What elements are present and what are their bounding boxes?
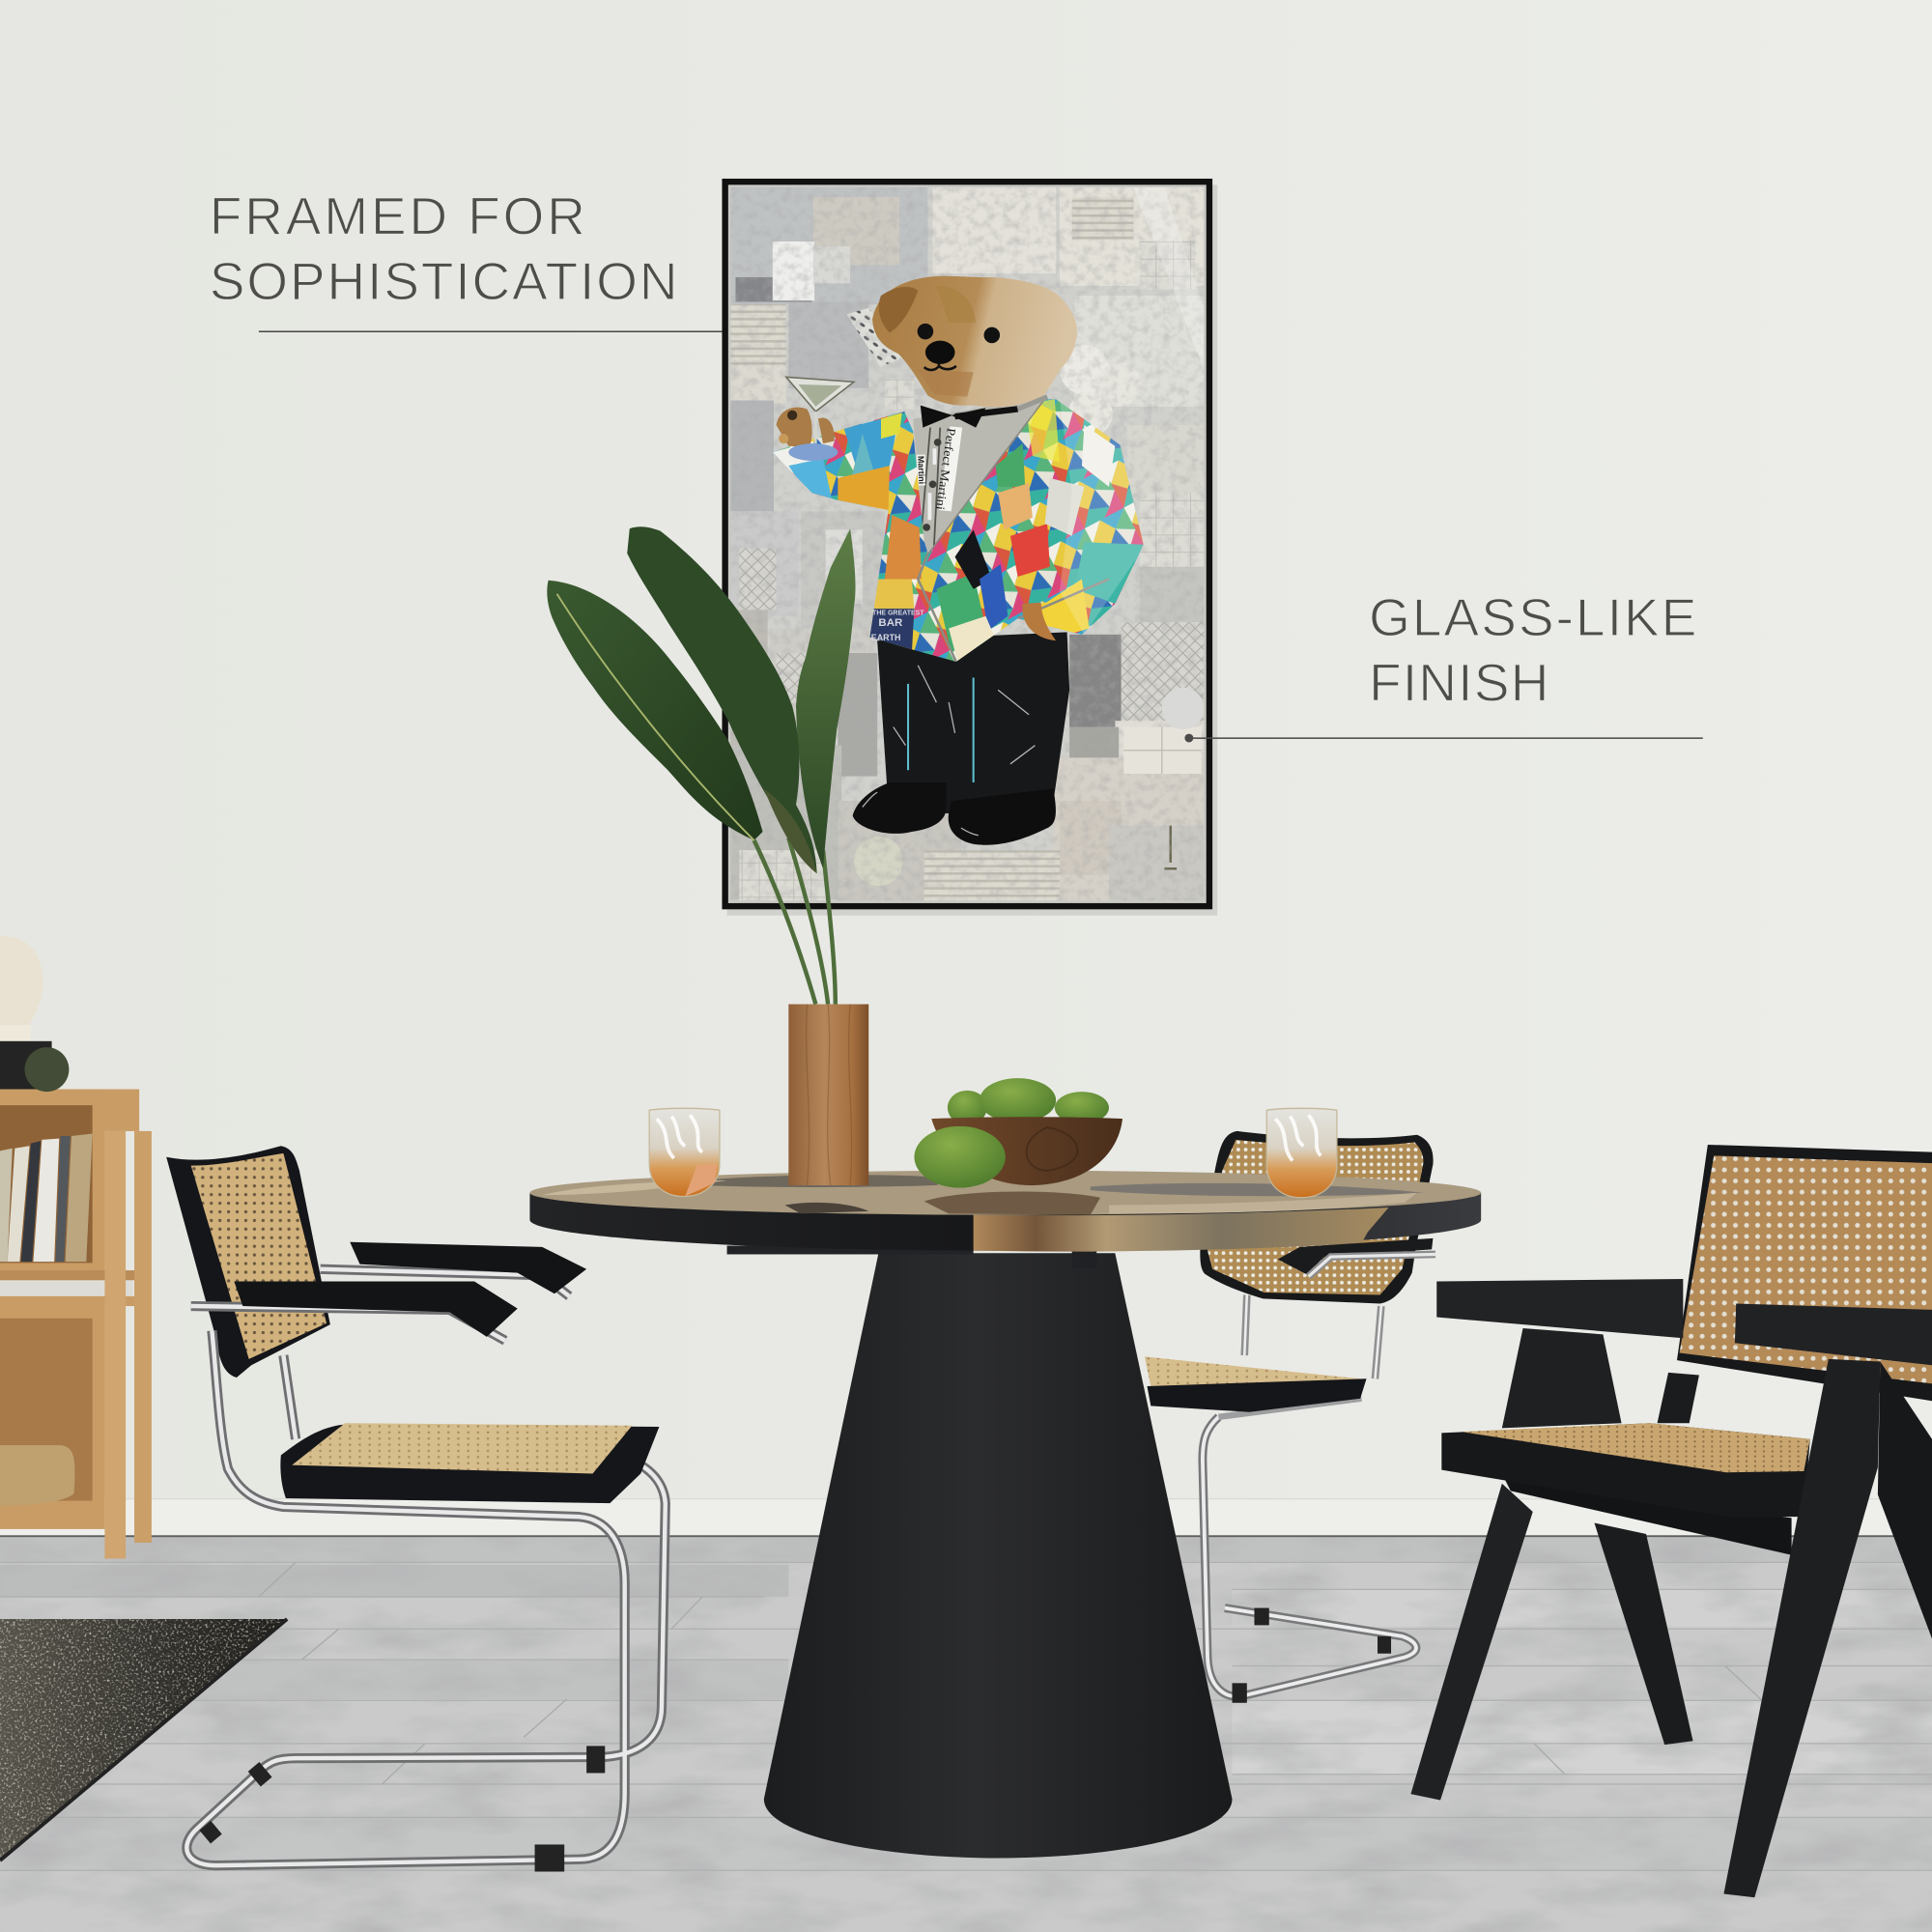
heading: glass-like finish: FINISH [1369, 653, 1548, 713]
framed artwork [722, 179, 1217, 916]
baseboard [0, 1498, 1932, 1537]
under rail [727, 1246, 1096, 1267]
text on the shirt: Perfect Martini [933, 427, 958, 511]
far chair [1145, 1131, 1434, 1703]
rear armrest [350, 1242, 586, 1293]
shirt [913, 397, 1047, 554]
bear trousers [853, 632, 1069, 845]
bear head [872, 276, 1077, 407]
vase [788, 1005, 868, 1185]
chrome arm of far chair [1278, 1238, 1435, 1276]
heading: glass-like finish [1369, 587, 1696, 713]
bear hand at pocket [1022, 603, 1056, 640]
heading: framed for sophistication: FRAMED FOR [210, 185, 585, 245]
seat [1441, 1423, 1810, 1517]
chair seat [280, 1424, 659, 1503]
back frame [1677, 1145, 1932, 1401]
text on the shirt [916, 426, 962, 511]
placket lines and buttons [921, 428, 941, 547]
martini glass and paw [777, 377, 854, 461]
heading: framed for sophistication: SOPHISTICATION [210, 251, 678, 311]
collage art [730, 187, 1204, 900]
right armchair [1410, 1145, 1932, 1897]
jacket patches [764, 394, 1152, 671]
jacket label text [871, 610, 924, 642]
jacket label text: THE GREATEST [872, 610, 924, 616]
rug [0, 1619, 287, 1861]
right glass [1266, 1108, 1337, 1198]
leaf: center [627, 526, 817, 873]
rear legs [1658, 1373, 1699, 1423]
callout line: finish [1184, 734, 1703, 742]
wall background [0, 0, 1932, 1540]
text on the shirt: Martini [916, 456, 926, 484]
books [0, 1133, 93, 1262]
jacket label text: BAR [878, 617, 903, 629]
heading: framed for sophistication [210, 185, 678, 311]
callout line: frame [259, 330, 722, 332]
bust and ornaments [0, 936, 69, 1092]
leaf: left [547, 581, 763, 840]
chair back [166, 1146, 330, 1378]
table base cone [764, 1253, 1233, 1858]
jacket label text: EARTH [871, 633, 900, 642]
collar and bow tie [921, 397, 1047, 428]
floor planks [0, 1538, 1932, 1932]
glass reflection [1133, 187, 1204, 370]
front armrest [1735, 1303, 1932, 1365]
small dresser detail [1123, 688, 1204, 774]
chair chrome frame [186, 1269, 666, 1865]
chair feet [535, 1844, 564, 1872]
left glass [649, 1108, 720, 1197]
shelf with books [0, 1090, 152, 1559]
front armrest [234, 1282, 518, 1337]
basket [0, 1445, 74, 1506]
table [529, 1171, 1481, 1858]
heading: glass-like finish: GLASS-LIKE [1369, 587, 1696, 647]
fruit bowl [914, 1078, 1122, 1188]
frame [722, 179, 1212, 909]
plant [547, 526, 856, 1005]
under rail [1504, 1479, 1792, 1555]
table top [529, 1171, 1481, 1252]
rear armrest [1436, 1279, 1683, 1338]
front legs [1723, 1359, 1880, 1897]
left chair [166, 1146, 666, 1872]
leaf: right [796, 528, 856, 868]
